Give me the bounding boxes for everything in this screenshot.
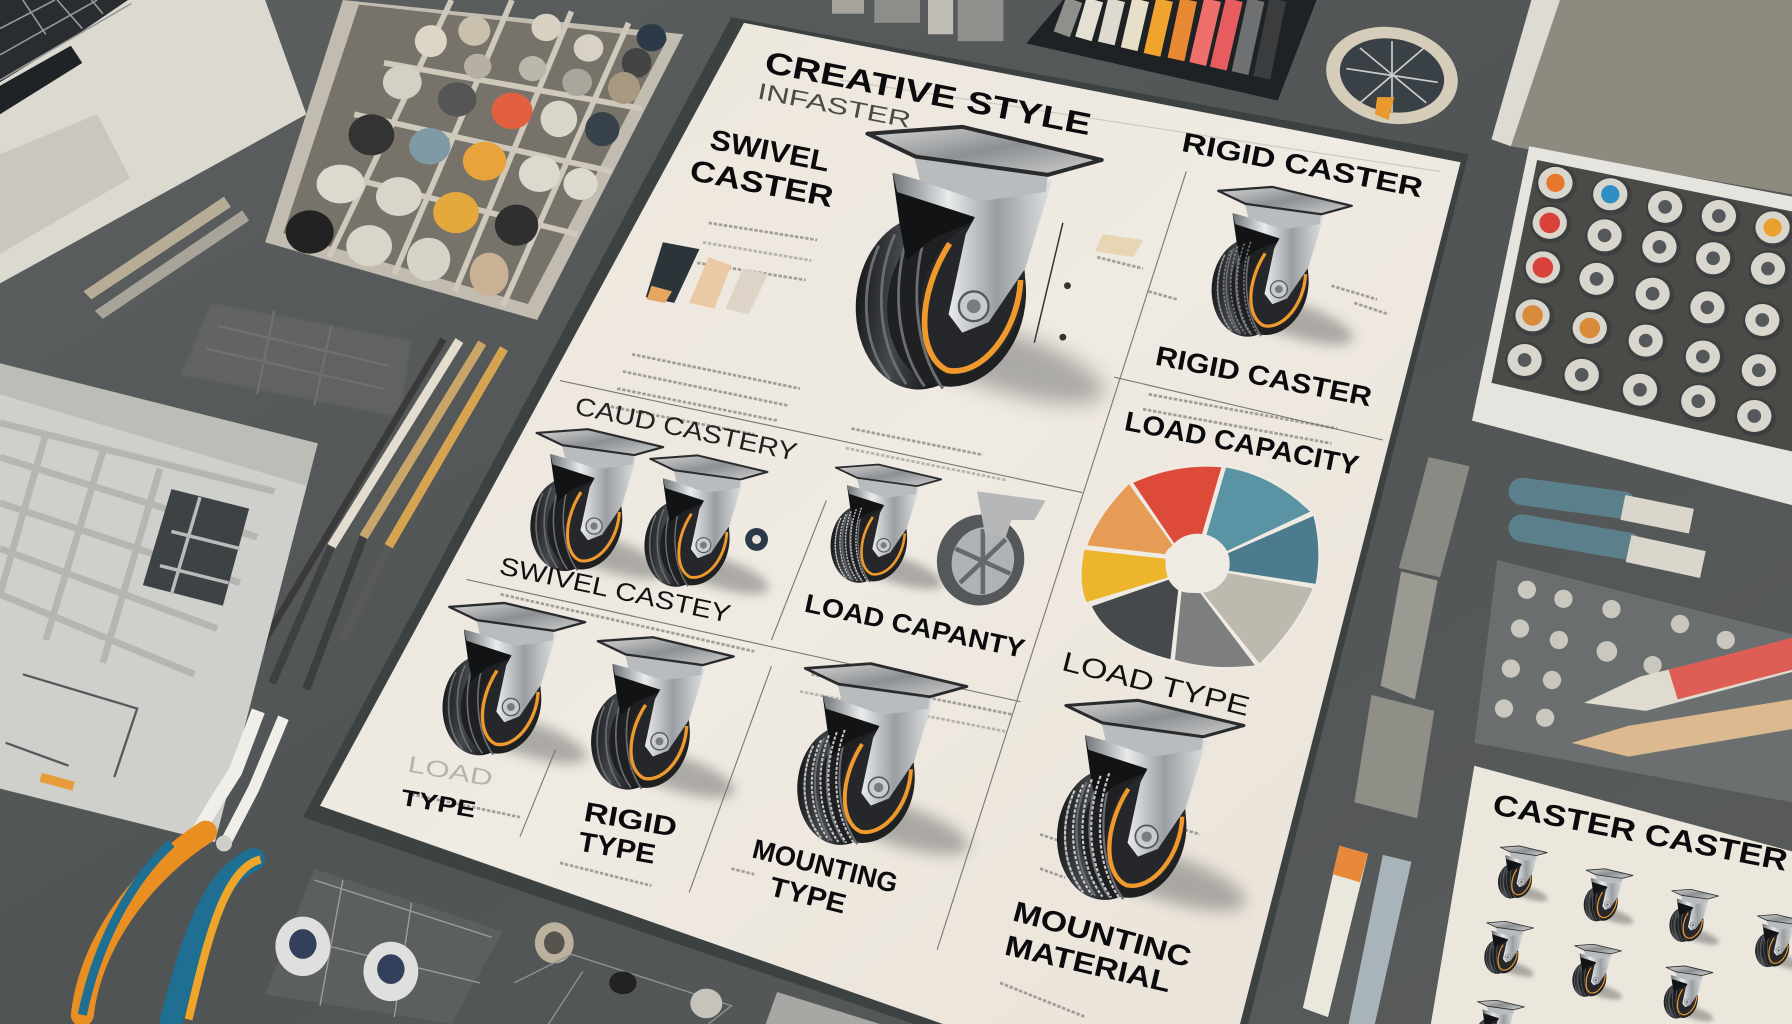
caster pair row two [526, 429, 773, 603]
heading: swivel caster [687, 121, 842, 214]
gem sheet [1474, 560, 1792, 802]
ruler blocks [1354, 457, 1470, 818]
heading: load capacity: LOAD CAPACITY [1122, 405, 1362, 481]
marker tray [1026, 0, 1317, 101]
heading: swivel castey: SWIVEL CASTEY [497, 552, 733, 629]
infographic paper sheet [320, 23, 1461, 1024]
pencils upper left [83, 197, 249, 319]
heading: swivel caster: SWIVEL [707, 124, 832, 179]
label: mounting material: MATERIAL [1002, 930, 1174, 999]
spool organizer box [1472, 0, 1792, 505]
pie chart: load capacity [1080, 465, 1320, 668]
subtitle: INFASTER [756, 78, 913, 133]
heading: rigid caster lower: RIGID CASTER [1153, 340, 1375, 412]
placeholder text lines [411, 223, 1389, 1017]
tread caster [791, 664, 974, 867]
card heading: CASTER CASTER [1490, 788, 1790, 878]
top metal hardware [832, 0, 1003, 41]
torn paper scrap [181, 303, 411, 417]
heading: load capanty: LOAD CAPANTY [802, 588, 1028, 664]
pebble tray [265, 0, 683, 320]
laptop [0, 0, 306, 283]
label: mounting material [1002, 896, 1195, 999]
label: mounting type: MOUNTING [749, 833, 901, 899]
large tread caster [1051, 700, 1252, 924]
spoked casters [827, 465, 1046, 618]
rigid caster illustration [1207, 187, 1358, 355]
round medallion [1318, 17, 1466, 134]
colored pencils [1571, 638, 1792, 757]
caster row three left [438, 603, 591, 774]
spoked wheel [924, 491, 1046, 618]
small swatches beside main caster [646, 223, 1143, 343]
label: mounting material: MOUNTINC [1010, 896, 1195, 974]
pliers [82, 711, 283, 1019]
label: load type [399, 751, 495, 823]
long pencils [245, 339, 504, 689]
label: mounting type: TYPE [767, 871, 849, 919]
card casters [1473, 846, 1792, 1024]
heading: swivel caster: CASTER [687, 154, 836, 214]
markers right [1522, 491, 1703, 565]
infographic board [303, 17, 1469, 1024]
label: load type: TYPE [399, 784, 478, 823]
caster row three second [586, 637, 740, 808]
label: rigid type: RIGID [582, 796, 679, 843]
label: load type: LOAD [406, 751, 495, 791]
label: rigid type: TYPE [576, 826, 658, 870]
marker pens bottom [1303, 846, 1411, 1024]
label: rigid type [576, 796, 679, 870]
main swivel caster [847, 127, 1112, 422]
heading: card castery: CAUD CASTERY [572, 392, 800, 467]
heading: rigid caster top: RIGID CASTER [1179, 126, 1426, 203]
bottom right caster card [1431, 766, 1792, 1024]
heading: load type right: LOAD TYPE [1059, 645, 1253, 722]
keyboard sketch sheet [0, 363, 318, 842]
bottom desk sketches and nuts [265, 869, 880, 1024]
title: CREATIVE STYLE [762, 45, 1094, 142]
